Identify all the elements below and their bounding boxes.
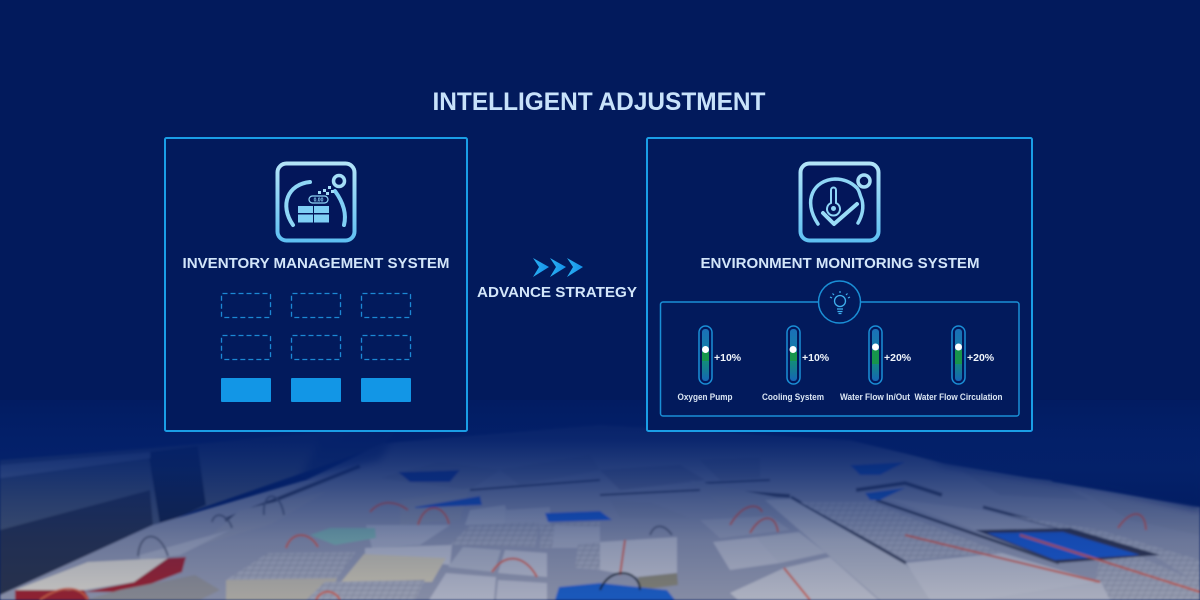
near tiles: [226, 552, 356, 580]
icon: inventory gauge: [278, 164, 354, 240]
red cloth raft: [15, 558, 168, 600]
arrow: triple chevrons: [533, 258, 583, 277]
slider: cooling system: Cooling System: [762, 392, 824, 402]
subheading: inventory management system: INVENTORY MANAGEMENT SYSTEM: [182, 255, 450, 272]
slider: oxygen pump: [678, 326, 742, 402]
dashed slots: [222, 294, 410, 360]
filled slots: [221, 378, 411, 402]
wall on the left: [0, 425, 400, 595]
icon: thermometer gauge: [800, 164, 878, 240]
slider: cooling system: +10%: [802, 352, 830, 364]
panel: adjustment sliders: [660, 281, 1019, 416]
slider: water flow in/out: [840, 326, 912, 402]
slider: water flow circulation: Water Flow Circulation: [914, 392, 1002, 402]
dark far wall on the right: [840, 405, 1200, 510]
panel: environment monitoring system: [647, 138, 1032, 431]
mid tiles: [400, 488, 470, 525]
seams between raft rows: [225, 466, 1155, 563]
far tiles: [380, 462, 500, 490]
dark shade of the wall corner: [300, 425, 400, 478]
slider: oxygen pump: Oxygen Pump: [678, 392, 733, 402]
subheading: environment monitoring system: ENVIRONMENT MONITORING SYSTEM: [700, 255, 980, 272]
raft floor: [0, 425, 1200, 600]
fade overlay blending photo into background: [0, 400, 1200, 600]
slider: cooling system: [762, 326, 830, 402]
blue covers: [987, 532, 1140, 560]
orange and grey rope handles: [40, 503, 1200, 600]
icon: inventory gauge: 0.00: [314, 198, 324, 204]
slider: water flow circulation: +20%: [967, 352, 995, 364]
teal net: [310, 528, 376, 545]
icon: light bulb: [818, 281, 860, 323]
slider: water flow in/out: +20%: [884, 352, 912, 364]
panel: inventory management system: [165, 138, 467, 431]
label: advance strategy: ADVANCE STRATEGY: [477, 284, 637, 301]
photo: fish cage rafts at the bottom: [0, 425, 1200, 600]
slider: water flow circulation: [914, 326, 1002, 402]
slider: oxygen pump: +10%: [714, 352, 742, 364]
slider: water flow in/out: Water Flow In/Out: [840, 392, 910, 402]
title: INTELLIGENT ADJUSTMENT: [432, 88, 766, 116]
